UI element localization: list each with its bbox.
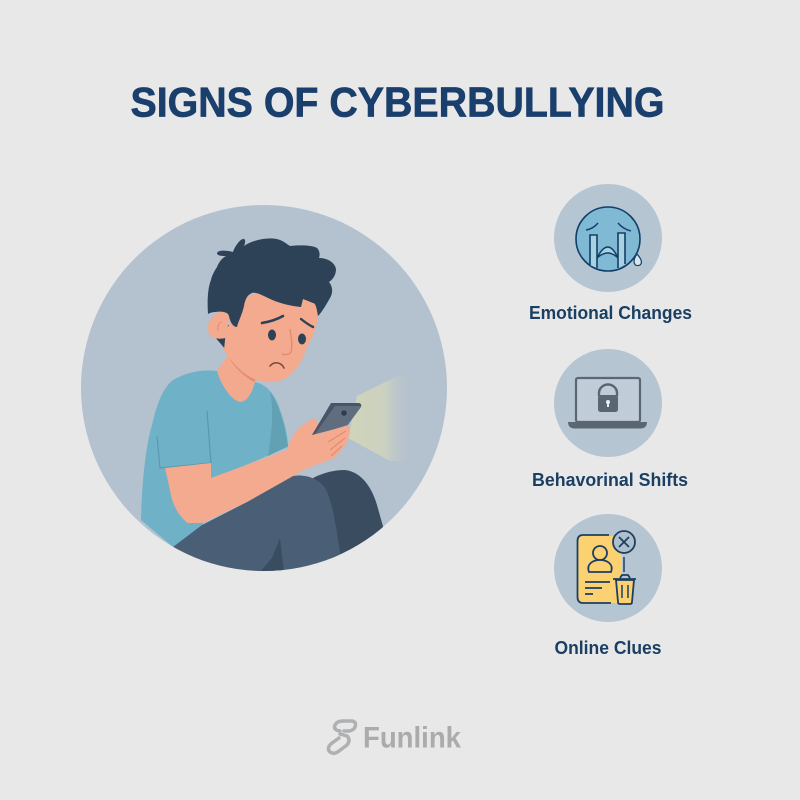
- logo: funlink: Funlink: [363, 722, 461, 754]
- back hair: [214, 325, 232, 350]
- label: emotional changes: Emotional Changes: [529, 303, 692, 323]
- logo: funlink: [328, 721, 461, 754]
- label: behavioral shifts: Behavorinal Shifts: [532, 470, 688, 490]
- icon: profile document with delete: [554, 514, 662, 622]
- label: online clues: Online Clues: [554, 638, 662, 658]
- illustration: teen looking at phone: [81, 205, 447, 580]
- icon: chain link: [328, 721, 356, 753]
- face: [224, 292, 318, 382]
- title: SIGNS OF CYBERBULLYING: [130, 78, 664, 126]
- shirt shadow and sleeve hem: [268, 392, 288, 456]
- ear: [208, 311, 230, 339]
- back leg: [313, 470, 384, 558]
- shirt: [141, 370, 288, 547]
- phone light beam: [348, 378, 397, 461]
- hair: [208, 238, 336, 327]
- icon: locked laptop: [554, 349, 662, 457]
- neck: [217, 356, 257, 402]
- sad eyes and brows: [262, 316, 313, 368]
- arm: [165, 418, 350, 523]
- hand fingers: [322, 425, 350, 458]
- phone: [312, 403, 361, 435]
- front leg: [173, 476, 340, 571]
- icon: crying face: [554, 184, 662, 292]
